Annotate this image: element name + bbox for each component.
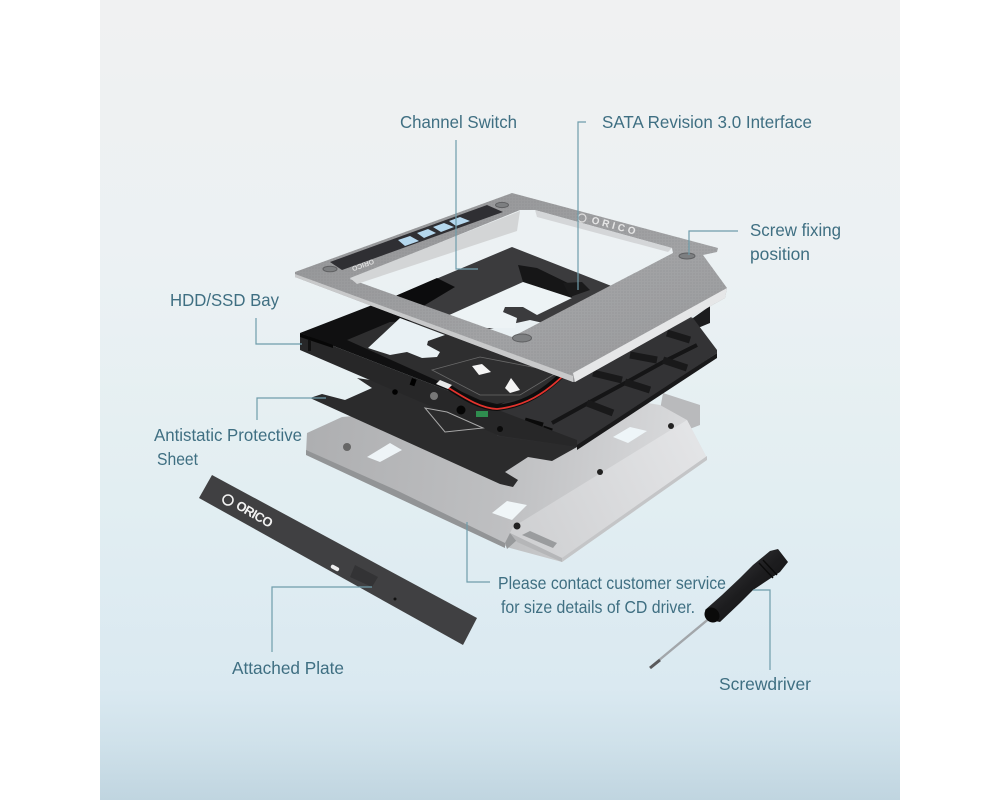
bay cutout	[368, 318, 445, 358]
callout: customer service note: for size details of CD driver.	[501, 597, 695, 617]
callout: screw fixing position: Screw fixing	[750, 220, 841, 240]
callout: screwdriver: Screwdriver	[719, 674, 811, 694]
callout: customer service note	[467, 522, 726, 617]
callout: screw fixing position	[689, 220, 841, 264]
screw holes	[323, 202, 695, 342]
frame left rim	[300, 297, 600, 412]
diagram on sheet	[425, 408, 483, 432]
callout: SATA interface: SATA Revision 3.0 Interface	[602, 112, 812, 132]
callout: attached plate: Attached Plate	[232, 658, 344, 678]
callout: channel switch	[400, 112, 517, 269]
attached plate	[199, 475, 477, 645]
antistatic protective sheet	[310, 378, 577, 487]
strip brand: ORICO	[350, 257, 375, 272]
frame front face	[300, 333, 577, 447]
rear opening	[447, 282, 572, 328]
diagram on bay	[472, 364, 491, 375]
callout: channel switch: Channel Switch	[400, 112, 517, 132]
callout: antistatic protective sheet	[154, 398, 326, 469]
callout: customer service note: Please contact customer service	[498, 573, 726, 593]
callout: screw fixing position: position	[750, 244, 810, 264]
ports on face	[392, 389, 398, 395]
callout: antistatic protective sheet: Antistatic Protective	[154, 425, 302, 445]
black HDD/SSD bay frame	[300, 247, 717, 450]
callout: SATA interface	[578, 112, 812, 290]
callout: HDD/SSD bay: HDD/SSD Bay	[170, 290, 279, 310]
window inner walls	[350, 211, 520, 284]
screwdriver	[650, 549, 788, 668]
plate logo mark	[578, 214, 586, 222]
metal tray	[306, 393, 707, 562]
rib section	[493, 318, 717, 447]
callout: screwdriver	[719, 590, 811, 694]
frame rear band	[393, 247, 693, 345]
logo mark	[223, 495, 233, 505]
SATA connector	[563, 282, 590, 297]
red cable	[447, 370, 567, 408]
callout: antistatic protective sheet: Sheet	[157, 449, 198, 469]
metal top plate	[295, 193, 727, 382]
plate logo: ORICO	[590, 215, 637, 238]
callout: attached plate	[232, 587, 372, 678]
background panel	[100, 0, 900, 800]
callout: HDD/SSD bay	[170, 290, 302, 344]
inner bay panel	[347, 320, 567, 404]
plate logo: ORICO	[234, 498, 276, 531]
label strip	[330, 205, 503, 270]
